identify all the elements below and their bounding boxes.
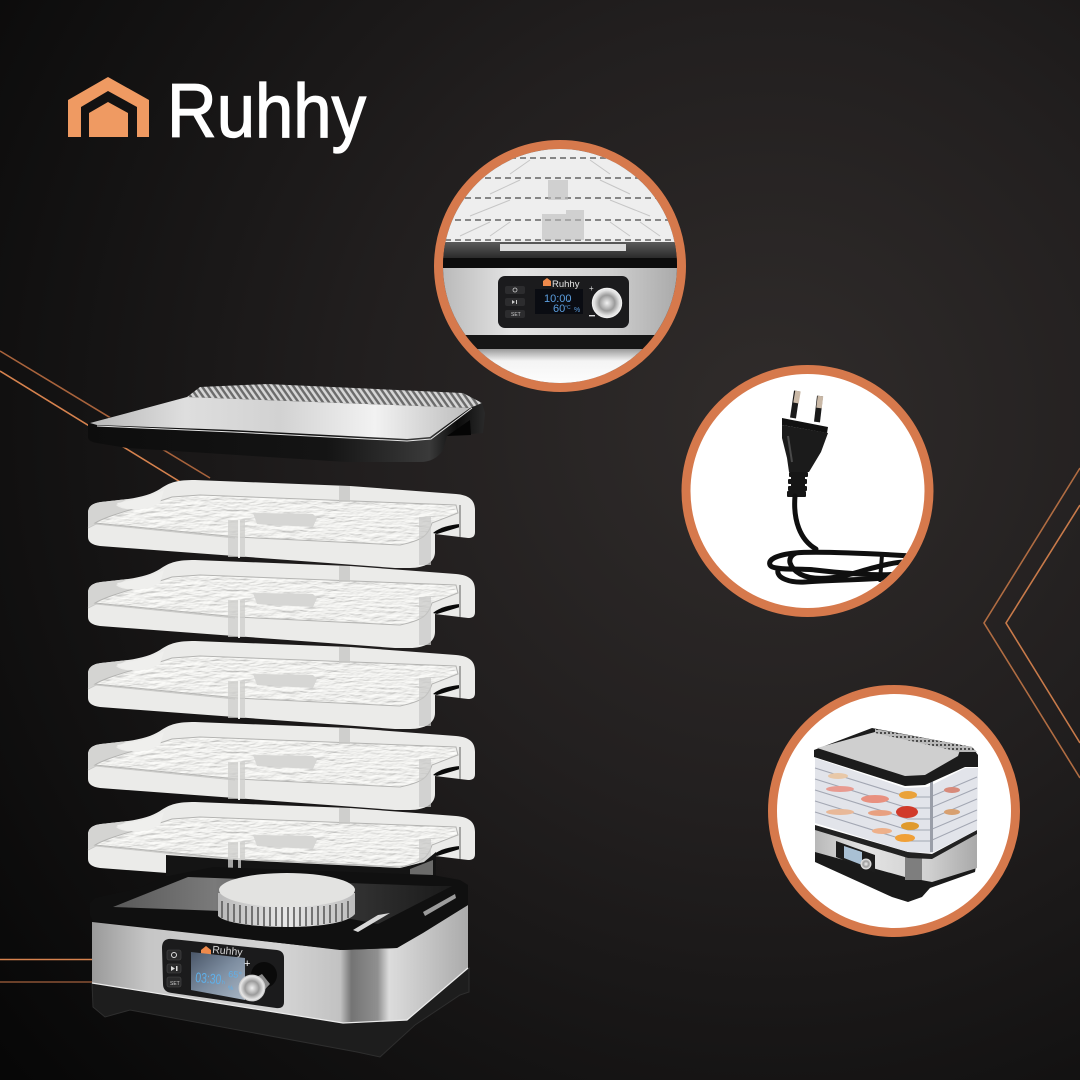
plus sign: + (244, 958, 250, 970)
dried fruit (826, 773, 960, 842)
stainless body (92, 905, 468, 1023)
tray 2 (88, 560, 475, 648)
LCD screen: 03:30 (195, 969, 222, 987)
mini lid (814, 728, 978, 786)
buttons (505, 286, 525, 318)
tray 1 (88, 480, 475, 568)
black top rim (90, 867, 468, 950)
mini control panel (836, 841, 875, 870)
dehydrator base (90, 867, 469, 1057)
display panel (498, 276, 629, 328)
LCD screen: % (228, 986, 234, 992)
white lower area (478, 349, 642, 383)
detail circle: control panel (438, 144, 682, 389)
tray mesh close-up (440, 148, 680, 243)
screen readout: % (574, 307, 580, 314)
grey band with vent (440, 242, 680, 258)
screen readout: °C (565, 305, 571, 311)
mini foot (815, 850, 977, 902)
screen readout (535, 289, 583, 315)
coiled cable (770, 496, 912, 582)
tray 4 (88, 722, 475, 810)
screen readout: 10:00 (544, 293, 572, 305)
plug pins (793, 391, 820, 422)
lower black band (466, 335, 654, 349)
tray 5 (88, 802, 475, 890)
logo: Ruhhy (68, 69, 366, 154)
screen readout: h (568, 298, 570, 303)
brand name: Ruhhy (167, 69, 366, 154)
icon: house (68, 77, 149, 137)
drying trays (88, 480, 475, 890)
exploded product view (88, 384, 485, 1057)
base opening behind tray 5 (166, 852, 436, 892)
stainless band (440, 268, 680, 335)
decorative orange chevrons right (984, 468, 1080, 778)
detail circle: assembled dehydrator (772, 690, 1016, 932)
LCD screen (191, 952, 245, 1000)
foot (92, 968, 469, 1057)
panel logo: Ruhhy (552, 279, 580, 290)
interior (113, 877, 452, 924)
strain relief (787, 472, 808, 497)
LCD screen: 65° (228, 969, 243, 980)
control panel (162, 939, 284, 1008)
SET button label: SET (170, 981, 180, 987)
detail circle: power cable (686, 370, 929, 612)
tray 3 (88, 641, 475, 729)
screen readout: 60 (553, 303, 565, 315)
LCD screen: h (222, 980, 225, 986)
plus and minus: + (589, 284, 594, 293)
plug body (782, 418, 828, 472)
buttons (167, 950, 181, 987)
decorative orange lines left (0, 351, 210, 982)
dial (592, 288, 622, 318)
tray support posts (228, 858, 433, 894)
fan cap (218, 873, 355, 927)
dial (239, 962, 277, 1001)
panel logo: Ruhhy (212, 944, 244, 959)
mini stainless body (815, 827, 977, 882)
dehydrator lid (88, 384, 485, 462)
SET label: SET (511, 312, 521, 318)
black band (440, 258, 680, 268)
mini trays (815, 758, 978, 853)
